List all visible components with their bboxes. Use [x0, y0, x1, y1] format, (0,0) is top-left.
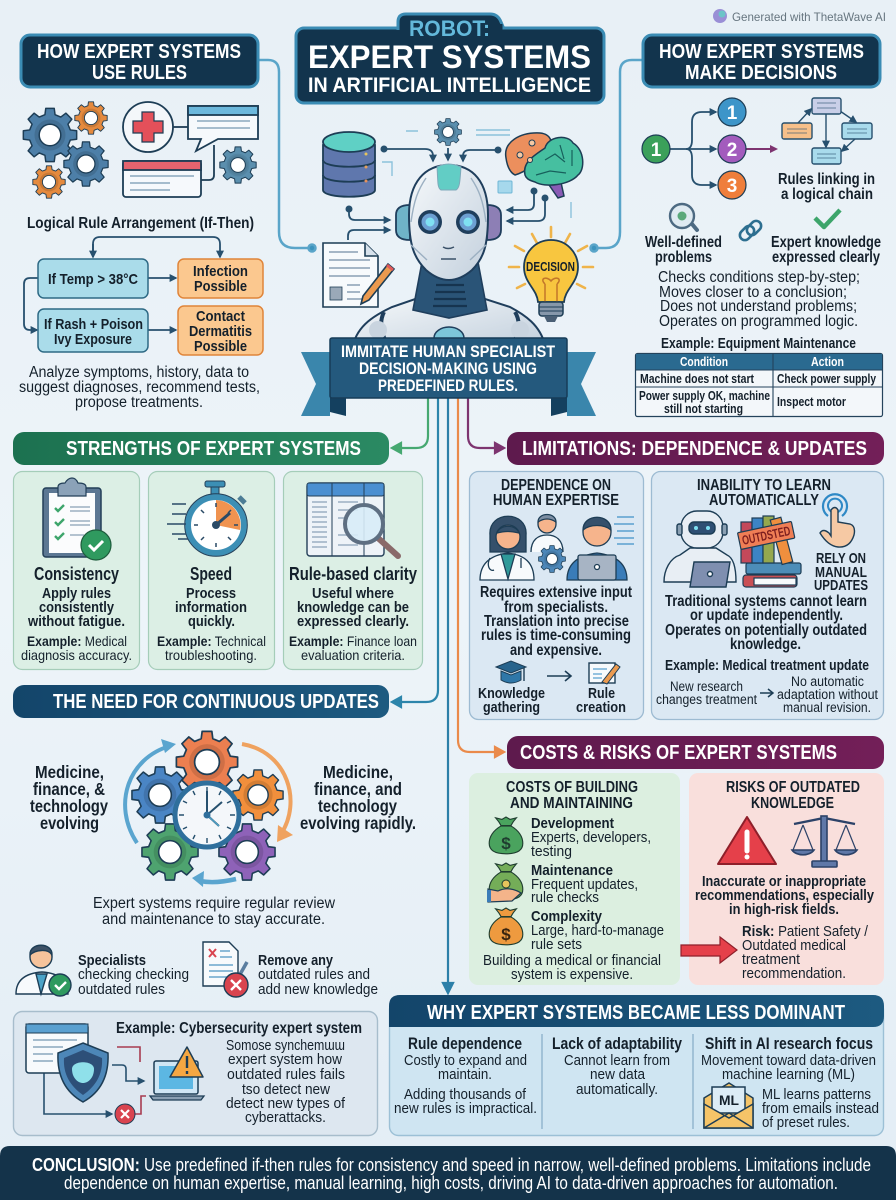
- text: rely on manual updates: RELY ON: [816, 550, 866, 567]
- heading: dependence: HUMAN EXPERTISE: [493, 492, 619, 509]
- text: shift in focus: ML learns patterns: [762, 1086, 871, 1103]
- text: rule dependence: new rules is impractical.: [394, 1100, 537, 1117]
- text: decision process: Does not understand problems;: [660, 298, 857, 315]
- text: rule dependence: [394, 1035, 537, 1117]
- icon: money bags: [487, 817, 523, 945]
- icon: document with pencil: [323, 243, 394, 307]
- text: risk: Risk: Patient Safety /: [742, 923, 869, 940]
- text: specialists: outdated rules: [78, 981, 165, 998]
- captions: knowledge to rule: Knowledge: [478, 685, 545, 702]
- text: inaccurate recommendations: Inaccurate or inappropriate: [702, 873, 866, 890]
- text: cost items: testing: [531, 843, 572, 860]
- heading: how expert systems use rules: USE RULES: [92, 61, 187, 84]
- title: EXPERT SYSTEMS: [308, 39, 591, 75]
- text: cost items: Building a medical or financial: [483, 952, 661, 969]
- text: medicine right: finance, and: [314, 779, 402, 799]
- text: dependence: [480, 584, 632, 659]
- text: rely on manual updates: MANUAL: [815, 564, 867, 581]
- text: lack of adaptability: automatically.: [576, 1081, 658, 1098]
- table: equipment maintenance: Action: [811, 354, 844, 369]
- flow chart: if-then rules: Dermatitis: [189, 323, 252, 340]
- text: shift in focus: machine learning (ML): [722, 1066, 855, 1083]
- panel: costs: [469, 773, 680, 985]
- heading: how expert systems make decisions: MAKE DECISIONS: [685, 61, 837, 84]
- heading: why: [389, 995, 884, 1027]
- icon: table with magnifier: [307, 483, 398, 556]
- icon: scales: [792, 816, 857, 867]
- text: cost items: system is expensive.: [511, 966, 633, 983]
- diagram: branching rules: 1: [727, 103, 738, 124]
- banner: [301, 338, 596, 416]
- flow chart: if-then rules: Infection: [193, 263, 248, 280]
- diagram: branching rules: 2: [727, 140, 737, 161]
- table: equipment maintenance: Condition: [680, 354, 728, 369]
- text: medicine right: technology: [318, 796, 397, 816]
- icon: experts: [480, 514, 634, 580]
- heading: risks: [726, 779, 860, 812]
- text: cybersecurity: cyberattacks.: [245, 1109, 326, 1126]
- text: dependence: Translation into precise: [484, 613, 629, 630]
- text: remove: add new knowledge: [258, 981, 378, 998]
- text: rely on manual updates: [814, 550, 868, 594]
- text: remove: outdated rules and: [258, 966, 370, 983]
- text: cost items: Complexity: [531, 908, 603, 925]
- text: rely on manual updates: UPDATES: [814, 577, 868, 594]
- icon: chain link: [738, 219, 763, 242]
- icon: robot with knowledge sources: [323, 119, 593, 349]
- panel: consistency: [14, 472, 140, 670]
- arrow: knowledge to rule: [547, 671, 571, 681]
- flow chart: if-then rules: If Temp > 38°C: [48, 271, 138, 288]
- text: research changes: [656, 679, 757, 707]
- heading: how expert systems make decisions: [643, 35, 880, 87]
- text: cost items: Large, hard-to-manage: [531, 922, 664, 939]
- icon: warning triangle: [718, 817, 776, 864]
- heading: costs and risks: COSTS & RISKS OF EXPERT SYSTEMS: [520, 741, 837, 764]
- heading: inability: [697, 477, 831, 509]
- conclusion: [0, 1146, 896, 1200]
- panel: cybersecurity example: [14, 1012, 378, 1136]
- text: specialists: Specialists: [78, 952, 146, 969]
- icon: hand tap: [820, 494, 854, 547]
- icon: outdated books: OUTDSTED: [741, 523, 792, 548]
- icon: check: [815, 210, 840, 227]
- text: cybersecurity: outdated rules fails: [227, 1066, 345, 1083]
- heading: cybersecurity: Example: Cybersecurity expert system: [116, 1020, 362, 1037]
- flow chart: if-then rules: Contact: [196, 308, 245, 325]
- heading: strengths: STRENGTHS OF EXPERT SYSTEMS: [66, 437, 361, 460]
- watermark: Generated with ThetaWave AI: [732, 10, 886, 24]
- captions: [645, 234, 881, 266]
- heading: costs and risks: [507, 736, 884, 769]
- panel: dependence on human expertise: [470, 472, 644, 720]
- heading: continuous updates: THE NEED FOR CONTINUOUS UPDATES: [53, 690, 379, 713]
- robot body: [353, 296, 545, 345]
- text: research changes: New research: [670, 679, 743, 694]
- text: consistency: [21, 564, 132, 663]
- captions: Well-defined: [645, 234, 722, 251]
- heading: dependence: [493, 477, 619, 509]
- text: consistency: without fatigue.: [27, 613, 125, 630]
- text: consistency: Consistency: [34, 564, 119, 584]
- text: cybersecurity: expert system how: [228, 1051, 342, 1068]
- text: consistency: Example: Medical: [27, 633, 127, 649]
- caption: chain: a logical chain: [781, 186, 873, 203]
- text: rule dependence: Adding thousands of: [404, 1086, 527, 1103]
- text: cybersecurity: [226, 1037, 346, 1126]
- text: medicine left: [30, 762, 108, 833]
- text: rule uses: [19, 364, 260, 411]
- connector lines to upper panels: [258, 60, 643, 252]
- captions: problems: [655, 249, 712, 266]
- text: remove: Remove any: [258, 952, 334, 969]
- text: cost items: rule checks: [531, 889, 599, 906]
- text: cost items: [483, 815, 664, 983]
- icon: outdated books: [738, 516, 801, 587]
- text: decision process: Checks conditions step-by-step;: [658, 269, 860, 286]
- panel: inability to learn: [652, 472, 884, 720]
- icon: gears: [23, 102, 108, 198]
- text: review and maintenance: and maintenance to stay accurate.: [102, 911, 325, 928]
- caption: chain: Rules linking in: [778, 171, 875, 188]
- captions: knowledge to rule: [478, 685, 626, 716]
- text: cost items: Maintenance: [531, 862, 613, 879]
- flow chart: if-then rules: Ivy Exposure: [54, 331, 132, 348]
- panel: how rules are used: [23, 102, 258, 198]
- heading: risks: KNOWLEDGE: [751, 795, 834, 812]
- captions: knowledge to rule: gathering: [483, 699, 540, 716]
- text: speed: Speed: [190, 564, 232, 584]
- text: consistency: Apply rules: [42, 585, 111, 602]
- icon: magnifier: [670, 204, 697, 230]
- text: no automatic adaptation: No automatic: [791, 674, 864, 689]
- icon: top gear: [435, 119, 461, 145]
- title: ROBOT:: [409, 16, 490, 41]
- flow chart: if-then rules: [24, 237, 263, 355]
- table: equipment maintenance: Inspect motor: [777, 394, 846, 409]
- title: [296, 14, 604, 103]
- text: risk: [742, 923, 869, 982]
- icon: decision bulb: [509, 227, 593, 322]
- icon: brain: [506, 133, 583, 198]
- text: lack of adaptability: Lack of adaptability: [552, 1035, 683, 1053]
- captions: knowledge to rule: Rule: [588, 685, 615, 702]
- text: decision process: Moves closer to a conclusion;: [659, 284, 847, 301]
- flow chart: if-then rules: Possible: [194, 338, 247, 355]
- heading: how expert systems use rules: [21, 35, 258, 87]
- icon: stopwatch: [167, 481, 247, 556]
- arrow: research to adaptation: [760, 689, 773, 697]
- text: clarity: expressed clearly.: [297, 613, 409, 630]
- heading: inability: INABILITY TO LEARN: [697, 477, 831, 494]
- text: shift in focus: Movement toward data-driven: [701, 1052, 876, 1069]
- text: shift in focus: of preset rules.: [762, 1114, 850, 1131]
- text: decision process: [658, 269, 860, 330]
- text: no automatic adaptation: [777, 674, 878, 715]
- heading: costs: [506, 779, 638, 812]
- text: rule dependence: maintain.: [438, 1066, 492, 1083]
- captions: knowledge to rule: creation: [576, 699, 626, 716]
- text: inaccurate recommendations: [695, 873, 875, 918]
- text: research changes: changes treatment: [656, 692, 757, 707]
- icon: graduation cap: [496, 661, 526, 683]
- text: clarity: [289, 564, 417, 663]
- text: clarity: knowledge can be: [297, 599, 409, 616]
- flow chart: if-then rules: If Rash + Poison: [44, 316, 143, 333]
- title: IN ARTIFICIAL INTELLIGENCE: [308, 73, 591, 97]
- heading: dependence: DEPENDENCE ON: [501, 477, 611, 494]
- heading: how expert systems use rules: HOW EXPERT SYSTEMS: [37, 40, 241, 63]
- table: equipment maintenance: Machine does not start: [640, 371, 755, 386]
- icon: clipboard: [43, 478, 111, 560]
- text: lack of adaptability: Cannot learn from: [564, 1052, 670, 1069]
- heading: logical rule arrangement: Logical Rule Arrangement (If-Then): [27, 215, 254, 232]
- icon: money bags: $: [501, 834, 511, 853]
- text: clarity: Useful where: [312, 585, 394, 602]
- connectors to robot head: [346, 146, 548, 240]
- text: clarity: Rule-based clarity: [289, 564, 417, 584]
- text: cybersecurity: detect new types of: [226, 1095, 346, 1112]
- icon: rule document: [589, 663, 620, 684]
- text: remove: [258, 952, 378, 998]
- icon: decision bulb: DECISION: [526, 260, 575, 274]
- text: lack of adaptability: new data: [590, 1066, 646, 1083]
- text: cost items: Frequent updates,: [531, 876, 638, 893]
- diagram: branching rules: [642, 98, 778, 199]
- diagram: branching rules: 3: [727, 176, 737, 197]
- banner: IMMITATE HUMAN SPECIALIST: [341, 343, 555, 361]
- icon: ML envelope: [704, 1083, 753, 1128]
- panel: speed: [148, 472, 274, 670]
- text: review and maintenance: [93, 895, 336, 928]
- text: cost items: Development: [531, 815, 614, 832]
- text: cost items: rule sets: [531, 936, 582, 953]
- text: speed: troubleshooting.: [165, 647, 257, 663]
- text: rule uses: suggest diagnoses, recommend tests,: [19, 379, 260, 396]
- heading: how expert systems make decisions: HOW EXPERT SYSTEMS: [659, 40, 864, 63]
- text: no automatic adaptation: manual revision.: [783, 700, 871, 715]
- banner: DECISION-MAKING USING: [359, 360, 537, 378]
- text: risk: treatment: [742, 951, 801, 968]
- icon: ML envelope: ML: [719, 1092, 739, 1108]
- text: cybersecurity: Somose synchemɯɯ: [226, 1037, 345, 1054]
- text: specialists: checking checking: [78, 966, 189, 983]
- panel: rule-based clarity: [284, 472, 422, 670]
- text: risk: Outdated medical: [742, 937, 846, 954]
- icon: specialist: [16, 945, 71, 996]
- text: consistency: diagnosis accuracy.: [21, 647, 132, 663]
- text: decision process: Operates on programmed logic.: [659, 313, 858, 330]
- icon: attack diagram: [26, 1024, 204, 1124]
- heading: costs: COSTS OF BUILDING: [506, 779, 638, 796]
- text: medicine right: [300, 762, 416, 833]
- text: risk: recommendation.: [742, 965, 846, 982]
- connectors from banner to sections: [392, 398, 504, 993]
- icon: gears with clock: [125, 731, 293, 887]
- heading: limitations: [507, 432, 884, 465]
- table: equipment maintenance: still not starting: [664, 401, 743, 416]
- icon: money bags: $: [501, 925, 511, 944]
- text: shift in focus: from emails instead: [762, 1100, 879, 1117]
- text: lack of adaptability: [552, 1035, 683, 1098]
- text: inability: or update independently.: [690, 607, 843, 624]
- caption: chain: [778, 171, 875, 203]
- text: dependence: rules is time-consuming: [481, 627, 631, 644]
- panel: why expert systems became less dominant: [389, 995, 884, 1136]
- text: dependence: from specialists.: [504, 599, 608, 616]
- text: inability: [665, 593, 867, 653]
- text: medicine right: Medicine,: [323, 762, 393, 782]
- text: medicine right: evolving rapidly.: [300, 813, 416, 833]
- heading: inability: AUTOMATICALLY: [709, 492, 819, 509]
- heading: risks: RISKS OF OUTDATED: [726, 779, 860, 796]
- text: speed: [157, 564, 266, 663]
- text: inaccurate recommendations: in high-risk fields.: [729, 901, 839, 918]
- text: dependence: Requires extensive input: [480, 584, 632, 601]
- text: medicine left: finance, &: [33, 779, 105, 799]
- text: rule dependence: Costly to expand and: [404, 1052, 527, 1069]
- panel: decisions: [636, 98, 882, 416]
- text: medicine left: technology: [30, 796, 108, 816]
- text: specialists: [78, 952, 189, 998]
- text: inability: knowledge.: [730, 636, 801, 653]
- banner: PREDEFINED RULES.: [378, 377, 518, 395]
- text: medicine left: Medicine,: [35, 762, 104, 782]
- heading: continuous updates: [13, 685, 389, 718]
- text: speed: Example: Technical: [157, 633, 266, 649]
- icon: database: [323, 132, 375, 197]
- flow chart: if-then rules: Possible: [194, 278, 247, 295]
- table: equipment maintenance: [636, 353, 882, 416]
- heading: strengths: [13, 432, 389, 465]
- text: medicine left: evolving: [40, 813, 99, 833]
- icon: medical records: [123, 102, 258, 197]
- table: equipment maintenance: Power supply OK, machine: [639, 388, 770, 403]
- text: rule uses: propose treatments.: [75, 394, 203, 411]
- text: no automatic adaptation: adaptation without: [777, 687, 878, 702]
- text: review and maintenance: Expert systems require regular review: [93, 895, 336, 912]
- text: speed: information: [175, 599, 247, 616]
- diagram: branching rules: 1: [651, 140, 662, 161]
- text: dependence: and expensive.: [510, 642, 602, 659]
- text: consistency: consistently: [39, 599, 115, 616]
- text: speed: Process: [186, 585, 236, 602]
- text: shift in focus: [701, 1035, 879, 1131]
- text: clarity: Example: Finance loan: [289, 633, 417, 649]
- panel: risks: [681, 773, 884, 985]
- icon: robot with laptop: [664, 511, 736, 587]
- heading: costs: AND MAINTAINING: [510, 795, 633, 812]
- text: clarity: evaluation criteria.: [301, 647, 405, 663]
- text: rule dependence: Rule dependence: [408, 1035, 522, 1053]
- text: cost items: Experts, developers,: [531, 829, 651, 846]
- text: rule uses: Analyze symptoms, history, data to: [29, 364, 249, 381]
- text: speed: quickly.: [188, 613, 235, 630]
- diagram: chain of rules: [782, 98, 872, 164]
- text: cybersecurity: tso detect new: [242, 1081, 330, 1098]
- icon: remove document: [203, 942, 248, 997]
- arrow: costs to risk: [681, 937, 737, 963]
